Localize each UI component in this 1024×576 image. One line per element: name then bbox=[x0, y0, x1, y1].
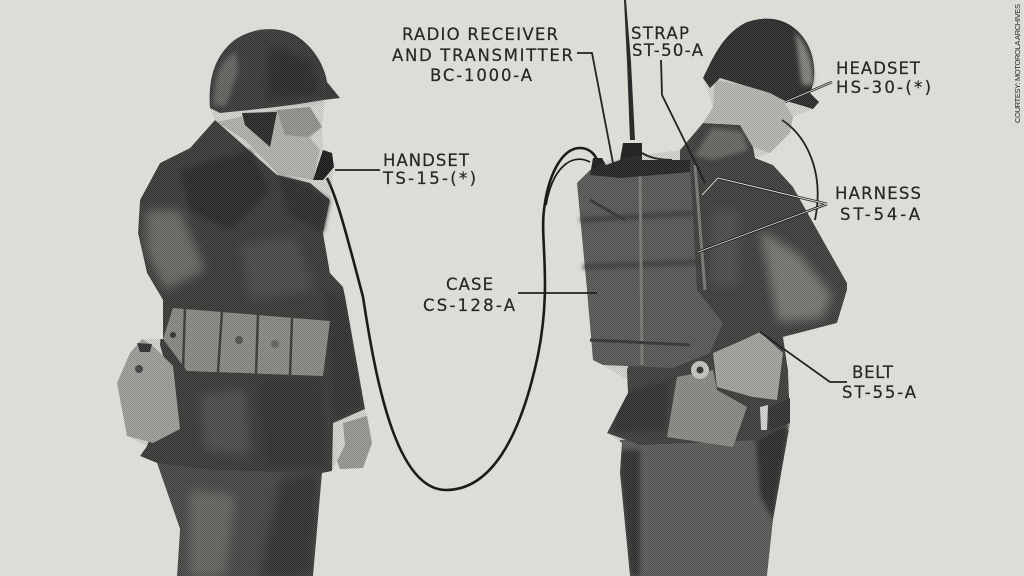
neck and head bbox=[703, 80, 793, 153]
label: strap: ST-50-A bbox=[632, 41, 704, 60]
label: belt: BELT bbox=[852, 363, 894, 382]
label: harness: HARNESS bbox=[835, 184, 921, 203]
label: case bbox=[423, 275, 516, 315]
left hand bbox=[337, 416, 372, 469]
credit: COURTESY: MOTOROLA ARCHIVES bbox=[1013, 4, 1022, 123]
line: strap bbox=[661, 60, 705, 183]
icon: handset bbox=[313, 150, 334, 180]
label: belt bbox=[842, 363, 917, 402]
label: case: CASE bbox=[446, 275, 493, 294]
label: radio receiver and transmitter: BC-1000-A bbox=[430, 66, 533, 85]
second cable bbox=[546, 159, 590, 205]
label: handset: HANDSET bbox=[383, 151, 470, 170]
line: harness bbox=[698, 178, 827, 252]
radio top and antenna base bbox=[590, 143, 690, 178]
line: belt bbox=[760, 332, 847, 382]
label: strap: STRAP bbox=[631, 24, 689, 43]
figure: left soldier bbox=[117, 29, 372, 576]
label: radio receiver and transmitter: RADIO RECEIVER bbox=[402, 25, 558, 44]
ear shadow bbox=[242, 112, 277, 147]
jacket bbox=[607, 123, 847, 445]
line: headset bbox=[785, 82, 832, 102]
label: harness bbox=[835, 184, 921, 224]
label: radio receiver and transmitter bbox=[392, 25, 573, 85]
canteen bbox=[117, 339, 180, 443]
raised arm shadow bbox=[277, 175, 330, 233]
antenna bbox=[624, 0, 635, 140]
label: radio receiver and transmitter: AND TRANSMITTER bbox=[392, 46, 573, 65]
trousers bbox=[157, 463, 324, 576]
line: handset bbox=[335, 169, 380, 171]
handset cable bbox=[327, 148, 597, 490]
headset wire bbox=[782, 120, 818, 220]
leader highlights bbox=[698, 82, 832, 252]
jacket bbox=[138, 120, 365, 473]
label: headset: HEADSET bbox=[836, 59, 921, 78]
helmet bbox=[210, 29, 340, 113]
line: radio bbox=[577, 53, 613, 163]
label: handset: TS-15-(*) bbox=[382, 169, 476, 188]
label: case: CS-128-A bbox=[423, 296, 516, 315]
label: handset bbox=[382, 151, 476, 188]
label: headset bbox=[836, 59, 931, 97]
label: strap bbox=[631, 24, 704, 60]
line: case bbox=[518, 292, 597, 294]
radio case bbox=[577, 162, 723, 368]
face and neck bbox=[217, 107, 322, 180]
trousers bbox=[620, 423, 790, 576]
figure: right soldier bbox=[577, 0, 847, 576]
leader lines bbox=[335, 53, 847, 382]
label: harness: ST-54-A bbox=[840, 205, 921, 224]
label: headset: HS-30-(*) bbox=[836, 78, 931, 97]
halftone overlay bbox=[117, 18, 847, 576]
ammunition belt bbox=[163, 308, 330, 376]
helmet bbox=[703, 19, 819, 109]
label: belt: ST-55-A bbox=[842, 383, 917, 402]
belt equipment bbox=[667, 332, 790, 447]
